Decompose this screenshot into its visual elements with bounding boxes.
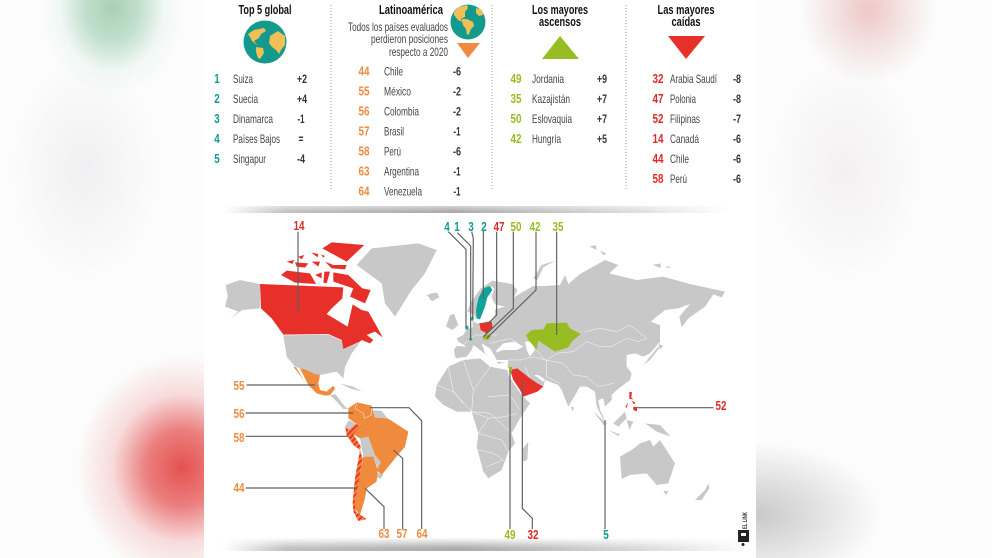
islands: [430, 245, 709, 500]
list: Latin America rows: -1: [454, 124, 461, 138]
panel: Latinoamérica: [348, 3, 486, 198]
country: Mexico: [293, 367, 335, 396]
country: Colombia, Venezuela, Brazil: [348, 402, 408, 475]
country: Sweden: [476, 286, 492, 319]
country: Iceland: [427, 292, 439, 301]
country: Chile: [353, 450, 367, 521]
list: caídas rows: 58: [652, 172, 664, 186]
country: Philippines: [625, 392, 637, 411]
icon: red down triangle: [668, 36, 705, 59]
list: top 5 rows: 2: [214, 92, 220, 106]
list: ascensos rows: Hungría: [532, 132, 561, 146]
landmass: Africa: [435, 358, 530, 478]
list: Latin America rows: 63: [358, 164, 370, 178]
list: caídas rows: Polonia: [670, 92, 696, 106]
leader line: Canada: [296, 232, 300, 312]
list: caídas rows: Chile: [670, 152, 689, 166]
panel: top 5 global: [214, 3, 307, 166]
list: Latin America rows: Argentina: [384, 164, 419, 178]
list: ascensos rows: +9: [597, 72, 607, 86]
countries: Netherlands, Denmark, Switzerland: [465, 317, 474, 340]
list: top 5 rows: 1: [214, 72, 220, 86]
rank labels on map: 63: [378, 527, 390, 541]
list: Latin America rows: Perú: [384, 144, 401, 158]
list: caídas rows: Arabia Saudí: [670, 72, 717, 86]
list: top 5 rows: Singapur: [233, 152, 266, 166]
list: caídas rows: -6: [733, 152, 741, 166]
country: United States: [283, 335, 360, 378]
list: Latin America rows: -1: [454, 164, 461, 178]
list: Latin America rows: -1: [454, 184, 461, 198]
heading: caídas: [658, 3, 715, 29]
heading: top 5: Top 5 global: [238, 3, 292, 17]
list: top 5 rows: 5: [214, 152, 220, 166]
list: Latin America rows: 57: [358, 124, 370, 138]
logo: [738, 512, 749, 546]
rank labels on map: 52: [716, 399, 727, 413]
heading: ascensos: ascensos: [539, 15, 581, 29]
list: Latin America rows: 64: [358, 184, 370, 198]
list: ascensos rows: 49: [510, 72, 522, 86]
text: description: Todos los países evaluados: [348, 20, 448, 34]
heading: Latinoamérica: Latinoamérica: [379, 3, 444, 17]
rank labels on map: 44: [234, 481, 245, 495]
list: top 5 rows: +2: [297, 72, 307, 86]
list: ascensos rows: Eslovaquia: [532, 112, 572, 126]
list: top 5 rows: +4: [297, 92, 307, 106]
icon: green up triangle: [542, 36, 579, 59]
list: caídas rows: 14: [652, 132, 664, 146]
list: Latin America rows: 56: [358, 104, 370, 118]
list: ascensos rows: 35: [510, 92, 522, 106]
text: description: respecto a 2020: [389, 45, 448, 59]
rank labels on map: 2: [481, 220, 487, 234]
list: caídas rows: 52: [652, 112, 664, 126]
rank labels on map: 14: [294, 219, 305, 233]
list: top 5 rows: Suecia: [233, 92, 258, 106]
list: caídas rows: 44: [652, 152, 664, 166]
list: caídas rows: -8: [733, 92, 741, 106]
list: Latin America rows: 58: [358, 144, 370, 158]
rank labels on map: 55: [234, 379, 245, 393]
list: caídas rows: -6: [733, 172, 741, 186]
list: caídas rows: [652, 72, 741, 186]
list: top 5 rows: =: [298, 132, 304, 146]
list: top 5 rows: -1: [298, 112, 305, 126]
list: Latin America rows: Chile: [384, 64, 403, 78]
heading: ascensos: Los mayores: [532, 3, 588, 17]
countries: Slovakia and Hungary: [483, 334, 491, 340]
list: top 5 rows: 4: [214, 132, 220, 146]
country: Canada: [260, 242, 383, 349]
country: Jordan: [509, 367, 512, 373]
country: Alaska: [225, 280, 260, 318]
rank labels on map: 57: [396, 527, 408, 541]
rank labels on map: 56: [234, 407, 245, 421]
text: description: perdieron posiciones: [371, 32, 448, 46]
rank labels on map: 58: [234, 431, 245, 445]
list: ascensos rows: Kazajistán: [532, 92, 570, 106]
landmass: Australia: [620, 440, 675, 485]
list: Latin America rows: México: [384, 84, 411, 98]
list: ascensos rows: [510, 72, 607, 146]
list: Latin America rows: -2: [453, 84, 461, 98]
world map: [225, 219, 727, 542]
list: Latin America rows: Colombia: [384, 104, 419, 118]
heading: ascensos: [532, 3, 588, 29]
rank labels on map: 35: [552, 220, 564, 234]
list: caídas rows: -8: [733, 72, 741, 86]
list: Latin America rows: [358, 64, 461, 198]
country: Argentina: [353, 457, 378, 515]
panel: mayores ascensos: [510, 3, 607, 146]
list: ascensos rows: +5: [597, 132, 607, 146]
rank labels on map: 47: [494, 220, 505, 234]
divider band: top: [225, 206, 730, 213]
list: Latin America rows: -6: [453, 144, 461, 158]
list: Latin America rows: 44: [358, 64, 370, 78]
heading: caídas: caídas: [672, 15, 701, 29]
panel: mayores caídas: [652, 3, 741, 186]
list: top 5 rows: 3: [214, 112, 220, 126]
list: Latin America rows: 55: [358, 84, 370, 98]
rank labels on map: 1: [454, 220, 460, 234]
list: caídas rows: -6: [733, 132, 741, 146]
map: Americas north: [225, 242, 439, 378]
list: ascensos rows: 42: [510, 132, 522, 146]
seas and borders: [437, 325, 647, 467]
rank labels on map: 42: [530, 220, 541, 234]
list: Latin America rows: Brasil: [384, 124, 404, 138]
list: top 5 rows: Suiza: [233, 72, 253, 86]
list: ascensos rows: 50: [510, 112, 522, 126]
rank labels on map: 32: [528, 528, 539, 542]
icon: orange down triangle: [457, 43, 480, 58]
map: Latin America: [293, 367, 408, 521]
list: Latin America rows: -6: [453, 64, 461, 78]
list: Latin America rows: Venezuela: [384, 184, 422, 198]
list: caídas rows: -7: [733, 112, 741, 126]
country: Saudi Arabia: [510, 368, 543, 397]
rank labels on map: 5: [603, 528, 609, 542]
country: Poland: [479, 322, 493, 333]
country: Peru: [345, 424, 362, 450]
list: top 5 rows: Dinamarca: [233, 112, 273, 126]
list: caídas rows: Perú: [670, 172, 687, 186]
rank labels on map: 64: [416, 527, 428, 541]
countries: Central America and Guianas: [330, 383, 388, 479]
list: Latin America rows: -2: [453, 104, 461, 118]
rank labels on map: 4: [444, 220, 450, 234]
icon: globe americas: [450, 4, 486, 40]
rank labels on map: 3: [468, 220, 474, 234]
rank labels on map: 50: [510, 220, 522, 234]
list: ascensos rows: Jordania: [532, 72, 564, 86]
list: ascensos rows: +7: [597, 92, 607, 106]
list: top 5 rows: Países Bajos: [233, 132, 280, 146]
divider band: bottom: [222, 538, 752, 551]
list: caídas rows: 32: [652, 72, 664, 86]
list: caídas rows: Filipinas: [670, 112, 700, 126]
heading: caídas: Las mayores: [658, 3, 715, 17]
rank labels on map: [234, 219, 727, 542]
country: Greenland: [357, 243, 437, 317]
list: ascensos rows: +7: [597, 112, 607, 126]
icon: globe atlantic: [244, 20, 286, 64]
list: caídas rows: 47: [652, 92, 664, 106]
list: top 5 rows: [214, 72, 307, 166]
leader lines: Europe and Asia: [448, 231, 713, 529]
landmass: Eurasia: [454, 260, 725, 420]
leader lines: Latin America: [246, 385, 422, 529]
list: caídas rows: Canadá: [670, 132, 699, 146]
logo: EL LINK: [743, 512, 749, 529]
list: top 5 rows: -4: [297, 152, 305, 166]
text: description: [348, 20, 448, 59]
rank labels on map: 49: [504, 528, 516, 542]
country: Kazakhstan: [526, 323, 581, 352]
map: Old World: [430, 245, 725, 500]
